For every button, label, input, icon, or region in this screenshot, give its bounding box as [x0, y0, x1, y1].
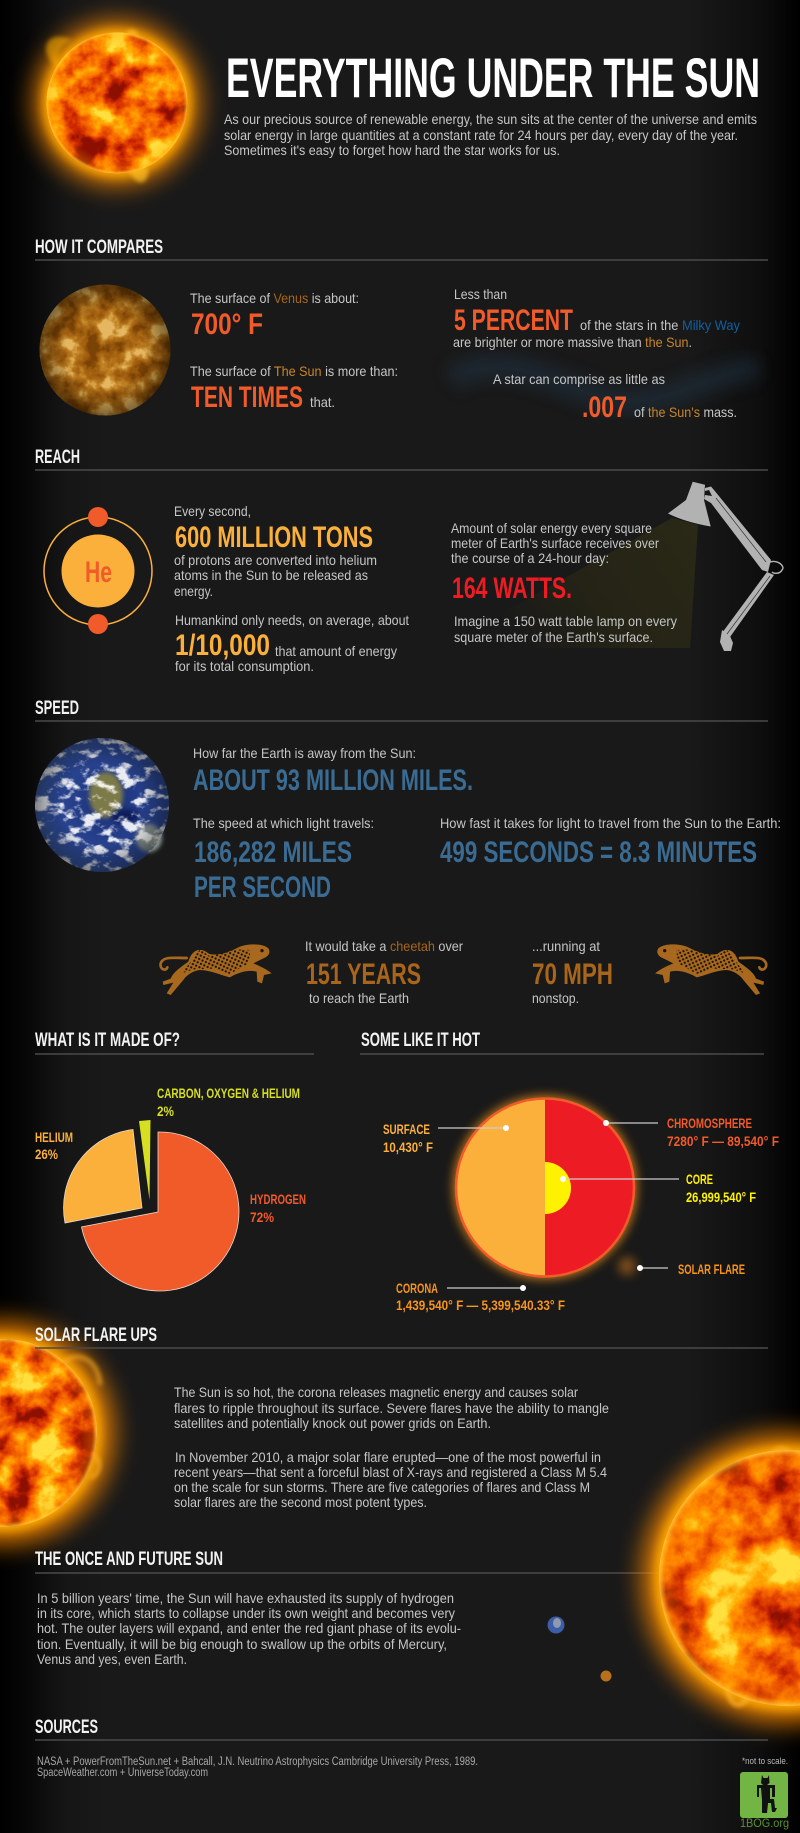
heading: once and future sun: THE ONCE AND FUTURE SUN: [35, 1549, 223, 1570]
callout: solar flare: SOLAR FLARE: [678, 1262, 745, 1277]
text: sources list: SpaceWeather.com + UniverseToday.com: [37, 1767, 208, 1779]
text: every second: Every second,: [174, 503, 251, 519]
text: solar flare body: on the scale for sun storms. There are five categories of flares and Class M: [174, 1479, 590, 1495]
slice: helium: [64, 1130, 142, 1223]
glow: [453, 1096, 637, 1280]
text: star mass: A star can comprise as little as: [493, 371, 665, 387]
text: solar flare body: [174, 1384, 609, 1510]
callout: surface: SURFACE: [383, 1122, 430, 1137]
callout: core: 26,999,540° F: [686, 1190, 756, 1205]
heading: reach: REACH: [35, 447, 80, 468]
callout: corona: [396, 1281, 565, 1313]
icon: tiny venus: [600, 1670, 612, 1682]
label: helium: 26%: [35, 1147, 58, 1162]
text: how fast: How fast it takes for light to travel from the Sun to the Earth:: [440, 815, 781, 831]
text: future sun body: Venus and yes, even Earth.: [37, 1651, 187, 1667]
intro text: As our precious source of renewable energy, the sun sits at the center of the universe and emits: [224, 111, 757, 127]
text: protons: [174, 552, 377, 599]
heading: what is it made of: WHAT IS IT MADE OF?: [35, 1030, 180, 1051]
callout: solar flare: [618, 1257, 745, 1277]
layer: chromosphere half: [545, 1098, 634, 1276]
callout: chromosphere: CHROMOSPHERE: [667, 1116, 752, 1131]
heading: speed: SPEED: [35, 698, 79, 719]
text: running at: ...running at: [532, 938, 600, 954]
panel: reach: [44, 482, 783, 674]
text: that: that.: [310, 394, 335, 410]
text: how far: How far the Earth is away from the Sun:: [193, 745, 416, 761]
intro text: [224, 111, 757, 158]
icon: earth: [35, 738, 169, 872]
text: sun surface: The surface of The Sun is more than:: [190, 363, 398, 379]
text: solar flare body: flares to ripple throughout its surface. Severe flares have the ability to mangle: [174, 1400, 609, 1416]
text: protons: energy.: [174, 583, 213, 599]
slice: hydrogen: [82, 1132, 239, 1291]
chart: sun cross section: [383, 1096, 779, 1313]
intro text: Sometimes it's easy to forget how hard the star works for us.: [224, 142, 560, 158]
number: 151 years: 151 YEARS: [306, 958, 421, 991]
text: nonstop: nonstop.: [532, 990, 579, 1006]
number: 600 million tons: 600 MILLION TONS: [175, 521, 373, 554]
slice: carbon oxygen helium: [139, 1120, 150, 1200]
text: future sun body: [37, 1590, 461, 1667]
text: imagine lamp: [454, 613, 677, 645]
label: carbon oxygen helium: [157, 1086, 300, 1119]
label: helium: HELIUM: [35, 1130, 73, 1145]
icon: helium atom: [44, 507, 152, 634]
text: cheetah: It would take a cheetah over: [305, 938, 463, 954]
outline: [456, 1098, 634, 1276]
icon: cheetah right: [655, 944, 766, 995]
heading: how it compares: HOW IT COMPARES: [35, 237, 163, 258]
text: total consumption: for its total consumption.: [175, 658, 314, 674]
number: 186,282 miles per second: [194, 836, 352, 904]
number: 186,282 miles per second: PER SECOND: [194, 871, 331, 904]
layer: surface half: [456, 1098, 545, 1276]
icon: left flare sun: [0, 1321, 115, 1545]
text: future sun body: tion. Eventually, it will be big enough to swallow up the orbits of Mercury,: [37, 1636, 447, 1652]
decoration: blue milky way wave: [452, 367, 758, 402]
number: 70 mph: 70 MPH: [532, 958, 613, 991]
icon: header sun: [33, 19, 201, 187]
callout: corona: 1,439,540° F — 5,399,540.33° F: [396, 1298, 565, 1313]
text: protons: atoms in the Sun to be released as: [174, 567, 368, 583]
text: solar flare body: The Sun is so hot, the corona releases magnetic energy and causes solar: [174, 1384, 578, 1400]
text: sources list: [37, 1756, 478, 1779]
light cone: [440, 518, 698, 648]
number: 700 degrees: 700° F: [191, 308, 263, 341]
text: solar energy: Amount of solar energy every square: [451, 520, 652, 536]
text: venus surface: The surface of Venus is about:: [190, 290, 359, 306]
text: speed of light: The speed at which light travels:: [193, 815, 374, 831]
text: solar energy: the course of a 24-hour day:: [451, 550, 609, 566]
callout: surface: [383, 1122, 509, 1155]
text: future sun body: in its core, which starts to collapse under its own weight and becomes very: [37, 1605, 455, 1621]
callout: chromosphere: 7280° F — 89,540° F: [667, 1134, 779, 1149]
text: solar flare body: solar flares are the second most potent types.: [174, 1494, 427, 1510]
intro text: solar energy in large quantities at a constant rate for 24 hours per day, every day of the year.: [224, 127, 738, 143]
callout: chromosphere: [603, 1116, 779, 1149]
chart: composition pie: [35, 1086, 306, 1291]
text: imagine lamp: square meter of the Earth's surface.: [454, 629, 653, 645]
label: helium: [35, 1130, 73, 1162]
callout: surface: 10,430° F: [383, 1140, 433, 1155]
icon: venus planet: [40, 284, 170, 416]
heading: some like it hot: SOME LIKE IT HOT: [361, 1030, 480, 1051]
text: brighter: are brighter or more massive than the Sun.: [453, 334, 692, 350]
text: solar flare body: In November 2010, a major solar flare erupted—one of the most powerful in: [175, 1449, 601, 1465]
label: carbon oxygen helium: 2%: [157, 1104, 174, 1119]
icon: right giant sun: [641, 1432, 800, 1724]
text: to reach: to reach the Earth: [309, 990, 409, 1006]
text: imagine lamp: Imagine a 150 watt table lamp on every: [454, 613, 677, 629]
text: total consumption: [175, 643, 397, 674]
text: total consumption: that amount of energy: [275, 643, 397, 659]
callout: core: [560, 1172, 756, 1205]
text: solar flare body: recent years—that sent a forceful blast of X-rays and registered a Class M 5.4: [174, 1464, 607, 1480]
number: ten times: TEN TIMES: [191, 381, 303, 414]
heading: sources: SOURCES: [35, 1717, 98, 1738]
label: carbon oxygen helium: CARBON, OXYGEN & HELIUM: [157, 1086, 300, 1101]
panel: how it compares: [40, 284, 758, 424]
icon: helium atom: He: [85, 556, 112, 589]
label: hydrogen: [250, 1192, 306, 1225]
number: 5 percent: 5 PERCENT: [454, 304, 573, 337]
text: not to scale: *not to scale.: [742, 1756, 788, 1766]
icon: cheetah left: [160, 944, 272, 995]
callout: core: CORE: [686, 1172, 713, 1187]
text: solar flare body: satellites and potentially knock out power grids on Earth.: [174, 1415, 491, 1431]
label: hydrogen: HYDROGEN: [250, 1192, 306, 1207]
text: protons: of protons are converted into helium: [174, 552, 377, 568]
number: 186,282 miles per second: 186,282 MILES: [194, 836, 352, 869]
logo: 1BOG: [740, 1772, 789, 1830]
text: milky way: of the stars in the Milky Way: [580, 317, 740, 333]
logo: 1BOG: 1BOG.org: [740, 1816, 789, 1830]
heading: solar flare ups: SOLAR FLARE UPS: [35, 1325, 157, 1346]
text: humankind: Humankind only needs, on average, about: [175, 612, 409, 628]
text: less than: Less than: [454, 286, 507, 302]
icon: desk lamp: [668, 482, 783, 651]
text: solar energy: [451, 520, 659, 566]
text: future sun body: In 5 billion years' time, the Sun will have exhausted its supply of hydrogen: [37, 1590, 454, 1606]
number: 93 million miles: ABOUT 93 MILLION MILES.: [193, 764, 473, 797]
layer: core: [545, 1162, 571, 1214]
text: solar energy: meter of Earth's surface receives over: [451, 535, 659, 551]
number: .007: .007: [582, 391, 627, 424]
number: 1/10,000: 1/10,000: [175, 629, 270, 662]
panel: speed: [35, 738, 781, 1006]
label: hydrogen: 72%: [250, 1210, 274, 1225]
text: sources list: NASA + PowerFromTheSun.net + Bahcall, J.N. Neutrino Astrophysics Cambridge University Press, 1989.: [37, 1756, 478, 1768]
icon: tiny earth: [548, 1616, 564, 1634]
text: future sun body: hot. The outer layers will expand, and enter the red giant phase of its evolu-: [37, 1620, 461, 1636]
text: of the suns mass: of the Sun's mass.: [634, 404, 737, 420]
callout: corona: CORONA: [396, 1281, 438, 1296]
number: 164 watts: 164 WATTS.: [452, 572, 572, 605]
